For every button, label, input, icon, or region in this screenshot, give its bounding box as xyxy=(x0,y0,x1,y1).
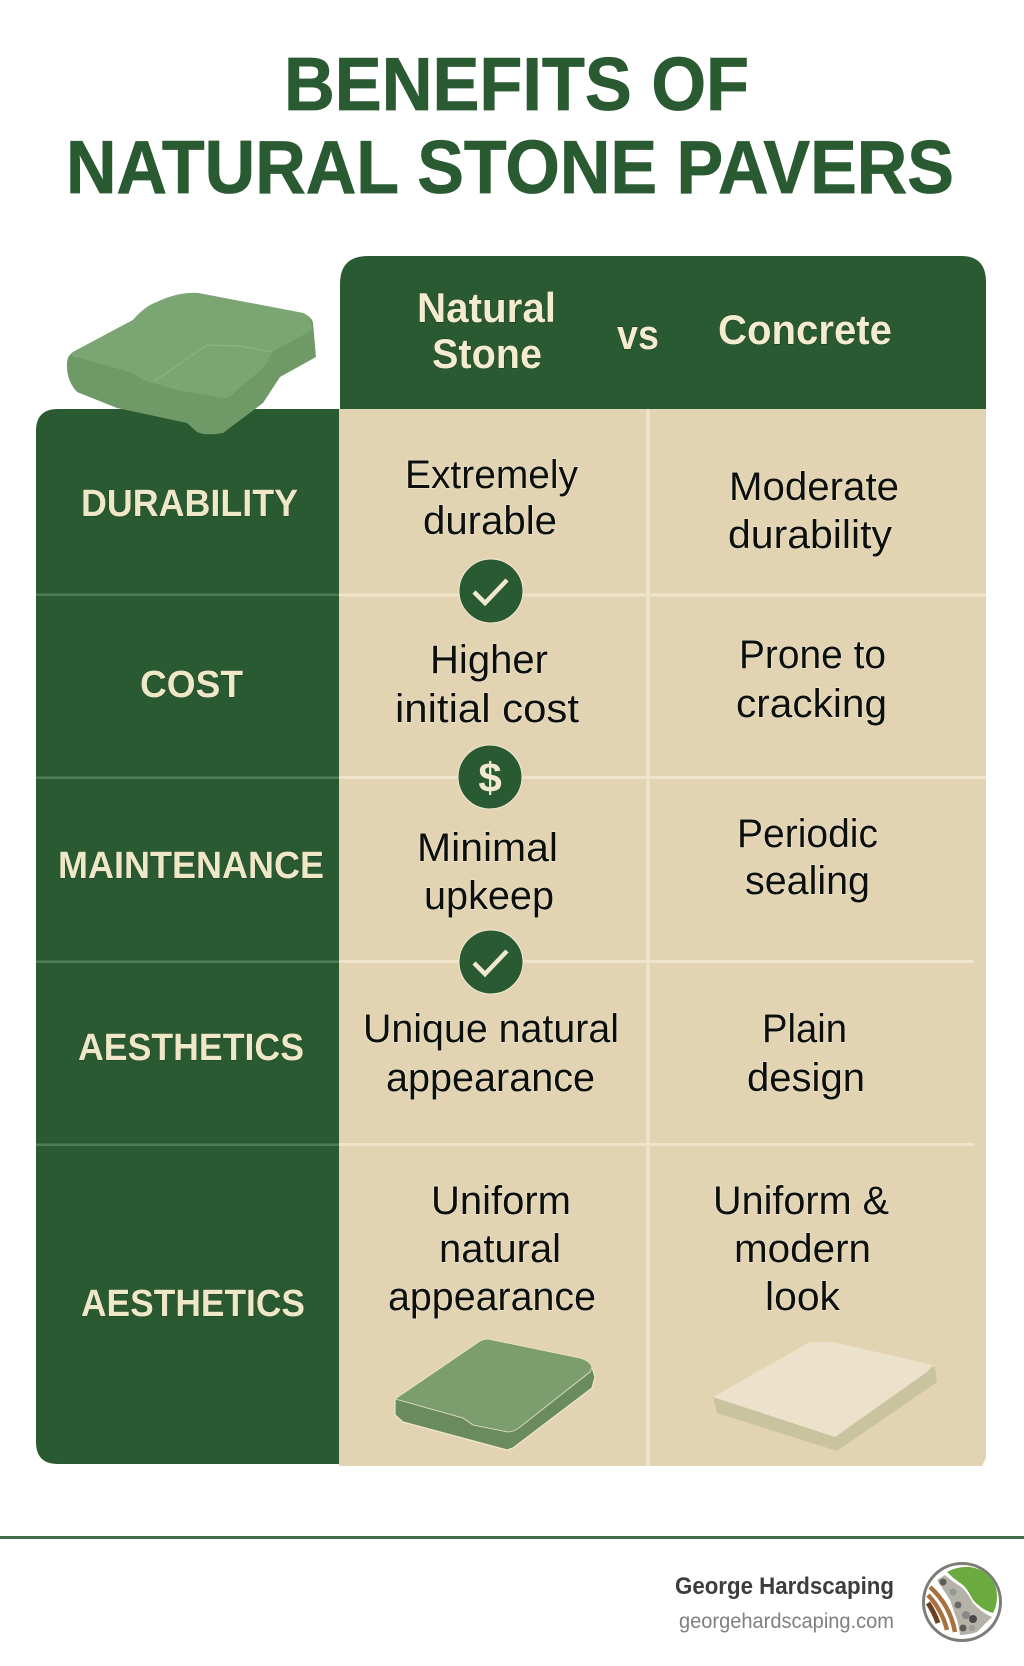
title: BENEFITS OF xyxy=(284,42,749,126)
column: natural stone values: appearance xyxy=(388,1275,596,1319)
icon: natural stone paver bottom xyxy=(395,1339,595,1450)
label: aesthetics second: AESTHETICS xyxy=(81,1283,305,1325)
column: concrete values: Plain xyxy=(762,1007,847,1051)
column: natural stone values: Minimal xyxy=(417,826,558,870)
panel: table body cream xyxy=(339,409,986,1466)
column: concrete values: Moderate xyxy=(729,465,899,509)
column: natural stone values: Extremely xyxy=(405,453,578,497)
logo leaf xyxy=(947,1567,997,1613)
title: NATURAL STONE PAVERS xyxy=(66,125,954,209)
footer brand text: George Hardscaping xyxy=(675,1573,894,1600)
header: natural stone: Natural xyxy=(417,284,556,331)
label: maintenance: MAINTENANCE xyxy=(58,845,324,887)
label: cost: COST xyxy=(140,664,243,706)
title xyxy=(66,42,954,209)
icon: concrete paver bottom xyxy=(713,1342,937,1451)
icon: natural stone paver top xyxy=(67,293,316,434)
column: concrete values: design xyxy=(747,1056,865,1100)
panel: category column xyxy=(36,409,339,1464)
column: concrete values: durability xyxy=(728,513,892,557)
icon: check badge durability xyxy=(459,559,523,623)
column: concrete values: cracking xyxy=(736,682,887,726)
footer rule xyxy=(0,1536,1024,1539)
column: concrete values: look xyxy=(765,1275,841,1319)
footer brand text xyxy=(675,1573,894,1633)
icon: check badge maintenance xyxy=(459,930,523,994)
icon: dollar badge cost xyxy=(458,745,522,809)
icon: dollar badge cost: $ xyxy=(478,754,502,801)
icon: company logo xyxy=(924,1564,1000,1640)
column: natural stone values: Unique natural xyxy=(363,1007,619,1051)
column: natural stone values: durable xyxy=(423,499,557,543)
column: concrete values: Periodic xyxy=(737,812,878,856)
column: natural stone values: appearance xyxy=(386,1056,595,1100)
column: concrete values xyxy=(713,465,899,1319)
column: natural stone values: natural xyxy=(439,1227,561,1271)
column: concrete values: Uniform & xyxy=(713,1179,889,1223)
label: aesthetics: AESTHETICS xyxy=(78,1027,304,1069)
column: natural stone values: initial cost xyxy=(395,687,579,731)
column: concrete values: Prone to xyxy=(739,633,886,677)
column: natural stone values: upkeep xyxy=(424,874,554,918)
header: vs: vs xyxy=(617,311,659,358)
header: concrete: Concrete xyxy=(718,306,892,353)
logo stones xyxy=(937,1575,992,1635)
header: natural stone: Stone xyxy=(432,330,542,377)
label: durability: DURABILITY xyxy=(81,483,298,525)
logo brown arcs xyxy=(928,1587,955,1632)
column: natural stone values xyxy=(363,453,619,1319)
panel: header row xyxy=(340,256,986,409)
column: concrete values: sealing xyxy=(745,859,870,903)
column: natural stone values: Uniform xyxy=(431,1179,571,1223)
column: concrete values: modern xyxy=(734,1227,871,1271)
logo dark arc xyxy=(928,1603,938,1623)
footer brand text: georgehardscaping.com xyxy=(679,1610,894,1633)
header: natural stone xyxy=(417,284,556,377)
column: natural stone values: Higher xyxy=(430,638,548,682)
